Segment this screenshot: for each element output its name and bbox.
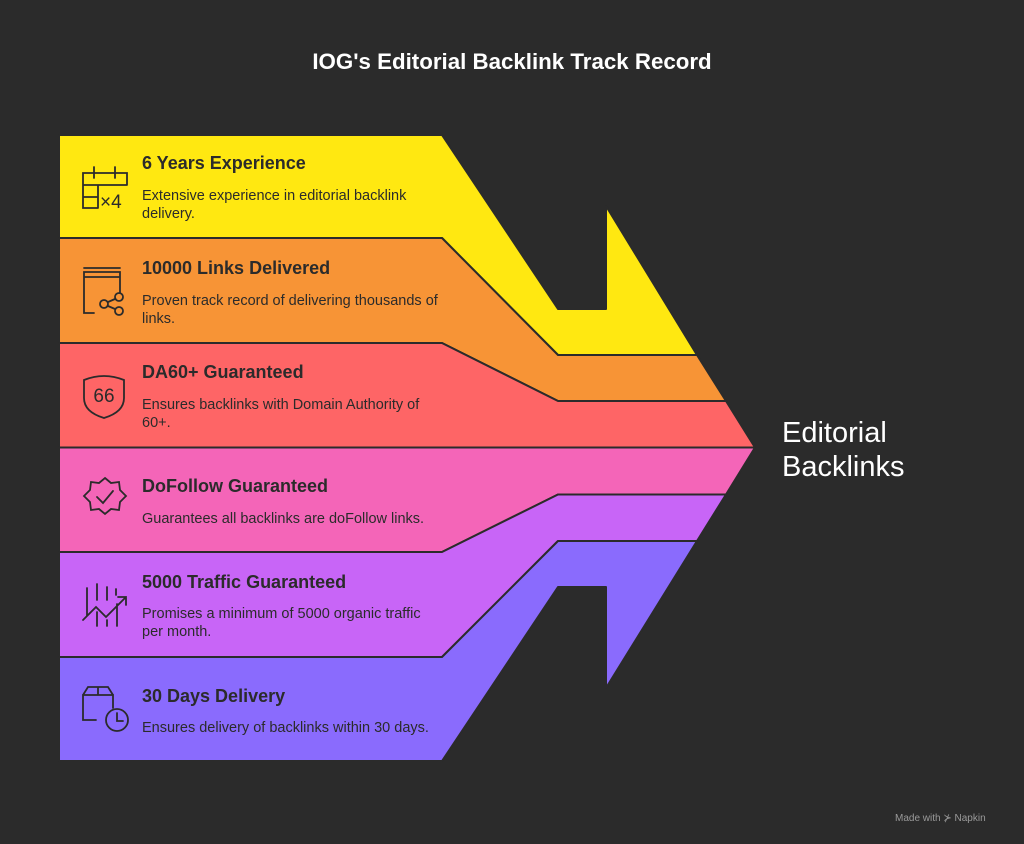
arrow diagram [59, 135, 755, 761]
item 4 text [142, 476, 424, 527]
item 2 text: Proven track record of delivering thousands of [142, 293, 439, 309]
item 3 text [142, 362, 420, 431]
item 3 text: 60+. [142, 415, 171, 431]
item 1 text: Extensive experience in editorial backlink [142, 188, 407, 204]
item 4 text: Guarantees all backlinks are doFollow links. [142, 511, 424, 527]
item 5 text: 5000 Traffic Guaranteed [142, 572, 346, 592]
item 5 text [142, 572, 421, 640]
item 1 text: 6 Years Experience [142, 153, 306, 173]
band: blue [59, 541, 697, 761]
icon: badge check [84, 478, 126, 514]
item texts [142, 153, 439, 736]
item 2 text: 10000 Links Delivered [142, 258, 330, 278]
icons [83, 167, 128, 731]
item 6 text [142, 686, 429, 736]
title: IOG's Editorial Backlink Track Record [312, 49, 712, 74]
label: Editorial Backlinks [782, 417, 904, 483]
item 5 text: Promises a minimum of 5000 organic traffic [142, 606, 421, 622]
item 6 text: Ensures delivery of backlinks within 30 days. [142, 720, 429, 736]
band: purple [59, 494, 726, 657]
item 1 text: delivery. [142, 206, 195, 222]
item 4 text: DoFollow Guaranteed [142, 476, 328, 496]
item 1 text [142, 153, 407, 222]
icon: calendar x4 [83, 167, 127, 213]
item 5 text: per month. [142, 624, 211, 640]
item 2 text [142, 258, 439, 327]
item 2 text: links. [142, 311, 175, 327]
icon: shield 66 [84, 376, 124, 418]
item 3 text: Ensures backlinks with Domain Authority of [142, 397, 420, 413]
label: Editorial Backlinks: Backlinks [782, 451, 904, 483]
band: pink [59, 448, 755, 552]
icon: book share [84, 268, 123, 315]
footer: made with napkin: Made with ⊁ Napkin [895, 813, 986, 824]
band: orange [59, 238, 726, 401]
item 3 text: DA60+ Guaranteed [142, 362, 304, 382]
label: Editorial Backlinks: Editorial [782, 417, 887, 449]
item 6 text: 30 Days Delivery [142, 686, 285, 706]
icon: box clock [83, 687, 128, 731]
icon: calendar x4: ×4 [100, 192, 122, 213]
icon: shield 66: 66 [93, 386, 115, 407]
band: yellow [59, 135, 697, 355]
band: red [59, 343, 755, 448]
icon: chart up [83, 584, 126, 626]
